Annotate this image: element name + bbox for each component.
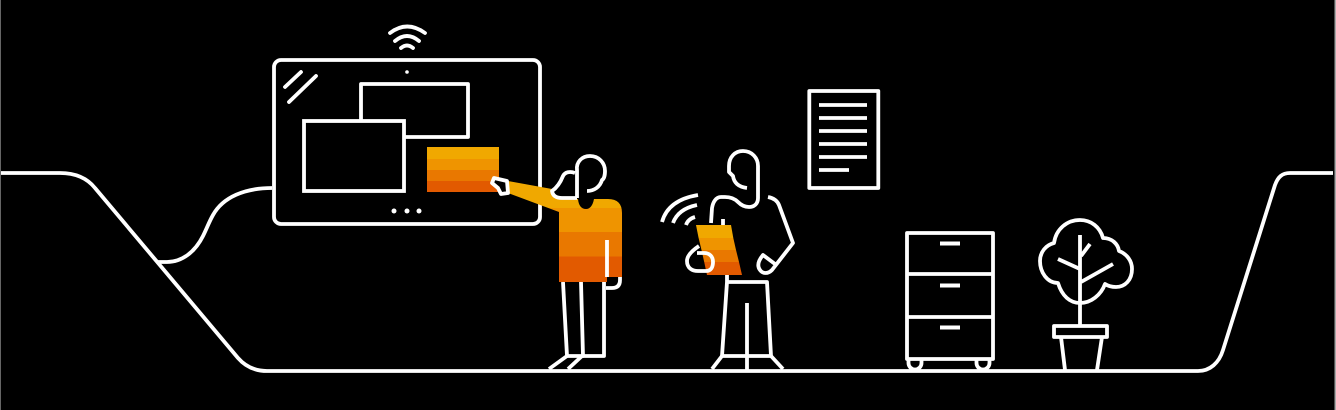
smart display [274, 60, 540, 224]
glass glare [285, 72, 316, 102]
potted plant [1040, 220, 1132, 370]
back window [361, 84, 468, 137]
trunk and branches [1058, 235, 1113, 326]
neck [578, 195, 594, 209]
wifi icon: tablet [662, 195, 698, 225]
wall document [809, 91, 878, 188]
hair [552, 172, 577, 198]
text lines [819, 105, 867, 170]
cable to display [158, 188, 272, 262]
hand at side [606, 277, 620, 288]
wheels [908, 360, 990, 370]
legs [549, 282, 604, 369]
camera [405, 70, 409, 74]
control dots [392, 208, 422, 214]
head [577, 156, 605, 198]
wifi icon: display [390, 26, 425, 48]
trousers [712, 275, 783, 370]
sleeve line [605, 240, 609, 277]
drawer handles [940, 242, 960, 330]
torso and arm [508, 181, 622, 282]
pot [1054, 326, 1107, 370]
chest line [721, 219, 725, 226]
filing cabinet [907, 233, 993, 370]
right arm [758, 197, 793, 273]
head and shoulder [711, 151, 758, 223]
front window [304, 121, 404, 191]
pointing hand [492, 178, 508, 194]
foliage [1040, 220, 1132, 303]
orange window [427, 147, 499, 192]
tablet [696, 225, 742, 275]
person pointing at display [492, 156, 622, 369]
landscape line [1, 173, 1333, 371]
person with tablet [662, 151, 793, 370]
hand holding tablet [687, 246, 713, 271]
